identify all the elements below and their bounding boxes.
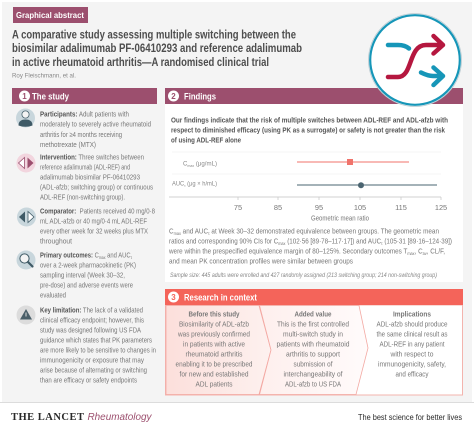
text: results: ratios and corresponding 90% CIs for C <box>169 236 298 246</box>
column: added value: arthritis to support <box>286 350 340 358</box>
text: primary outcomes: τ <box>131 255 132 260</box>
badge: graphical abstract <box>13 7 88 23</box>
column: added value: multi-switch study in <box>283 330 343 338</box>
axis: 85 <box>274 203 282 212</box>
axis: 75 <box>234 203 242 212</box>
column: implications: immunogenicity, safety, <box>378 360 446 368</box>
text: comparator: throughout <box>40 236 72 246</box>
text: intervention: Intervention: Three switches between <box>40 152 144 162</box>
text: comparator: every other week for 32 weeks plus MTX <box>40 226 148 236</box>
column: implications: and efficacy <box>396 370 429 378</box>
authors: Roy Fleischmann, et al. <box>12 72 76 80</box>
text: key limitation: Key limitation: The lack of a validated <box>40 306 143 314</box>
footer logo: THE LANCET <box>11 412 84 423</box>
axis: 95 <box>315 203 323 212</box>
row: AUC: (μg × h/mL) <box>186 180 217 188</box>
text: results: τ <box>381 241 383 246</box>
column: before this study: ADL patients <box>196 380 233 388</box>
axis: Geometric mean ratio <box>311 214 369 222</box>
text: results: were within the prespecified equivalence margin of 80–125%. Secondary outcomes T <box>169 246 448 256</box>
text: participants: moderately to severely active rheumatoid <box>40 120 151 128</box>
text: key limitation: immunogenicity or exposure that may <box>40 356 144 364</box>
column: added value <box>276 310 350 388</box>
text: key limitation: guidance which states that PK parameters <box>40 336 152 344</box>
axis: 115 <box>395 203 407 212</box>
text: intervention: reference adalimumab (ADL-REF) and <box>40 162 130 172</box>
column: implications: the same clinical result as <box>376 330 448 338</box>
footer tagline: The best science for better lives <box>358 413 462 422</box>
text: results: max <box>174 231 182 236</box>
row: Cmax: max <box>187 163 194 168</box>
chevron: before this study <box>166 306 271 394</box>
text: results: max <box>278 241 286 246</box>
text: primary outcomes: pre-dose) and adverse events were <box>40 280 133 290</box>
heading: research in context <box>165 289 463 305</box>
text: results: τ <box>208 231 210 236</box>
text: key limitation: are more likely to be sensitive to changes in <box>40 346 156 354</box>
text: results: (105·31 [89·16–124·39]) <box>383 236 452 246</box>
column: before this study: for new and established <box>180 370 248 378</box>
text: results: , CL/F, <box>427 246 445 256</box>
text: participants: Participants: Adult patients with <box>40 110 129 118</box>
text: results: (102·56 [89·78–117·17]) and AUC <box>285 236 382 246</box>
badge: graphical abstract: Graphical abstract <box>16 10 84 20</box>
text: results: av <box>423 251 427 256</box>
column: implications: ADL-afzb should produce <box>376 320 448 328</box>
text: participants: arthritis for ≥4 months receiving <box>40 130 122 139</box>
row: AUC: AUC <box>172 180 186 188</box>
icon: switching arrows <box>368 14 462 106</box>
text: intervention: ADL-REF (non-switching group). <box>40 192 125 202</box>
column: before this study: enabling it to be prescribed <box>176 360 252 368</box>
title <box>12 28 302 69</box>
text: key limitation: clinical efficacy endpoint; however, this <box>40 316 144 324</box>
title: A comparative study assessing multiple switching between the <box>12 28 296 42</box>
column: added value: Added value <box>294 310 332 318</box>
heading: research in context: 3 <box>171 293 176 302</box>
text: key finding: of using ADL-REF alone <box>171 136 241 144</box>
icon: participants <box>16 108 35 128</box>
heading: the study <box>12 88 157 104</box>
column: added value: patients with rheumatoid <box>276 340 350 348</box>
column: implications <box>376 310 448 378</box>
column: before this study: Biosimilarity of ADL-afzb <box>179 320 249 328</box>
footer logo <box>11 411 152 423</box>
heading: findings: Findings <box>184 92 216 102</box>
text: participants: methotrexate (MTX) <box>40 140 96 149</box>
text: key finding <box>171 116 448 144</box>
icon: key limitation <box>16 306 36 324</box>
text: primary outcomes: evaluated <box>40 290 66 300</box>
icon: intervention <box>16 154 36 172</box>
text: results: C <box>169 226 174 236</box>
panel: findings <box>165 88 463 282</box>
heading: research in context: Research in context <box>184 292 258 304</box>
icon: primary outcomes <box>16 250 36 270</box>
text: key limitation: arise because of alternating or switching <box>40 366 147 374</box>
panel: research in context <box>165 289 463 395</box>
text: results: , C <box>415 246 423 256</box>
text: results: max <box>407 251 415 256</box>
text: results: at Week 30–32 demonstrated equivalence between groups. The geometric mean <box>210 226 439 236</box>
text: primary outcomes: sampling interval (Week 30–32, <box>40 270 125 280</box>
title: biosimilar adalimumab PF-06410293 and reference adalimumab <box>12 42 302 55</box>
column: implications: Implications <box>393 310 431 318</box>
row: Cmax: C <box>183 160 188 168</box>
text: primary outcomes: Primary outcomes: C <box>40 250 107 260</box>
column: added value: This is the first controlled <box>277 320 349 328</box>
text: key limitation: study was designed following US FDA <box>40 326 141 334</box>
text: results <box>168 226 452 266</box>
row: AUC: τ <box>184 183 186 188</box>
row: Cmax: (μg/mL) <box>194 160 217 168</box>
chart: geometric mean ratio <box>169 152 447 222</box>
text: comparator <box>40 206 155 246</box>
text: key limitation: than are efficacy or safety endpoints <box>40 376 137 384</box>
text: participants <box>40 110 151 149</box>
heading: findings <box>165 88 463 104</box>
text: primary outcomes <box>40 250 136 300</box>
text: results: and AUC <box>181 226 209 236</box>
text: primary outcomes: and AUC <box>106 250 131 260</box>
text: comparator: mL ADL-afzb or 40 mg/0·4 mL ADL-REF <box>40 216 147 226</box>
axis <box>169 197 447 222</box>
text: primary outcomes: max <box>99 255 106 260</box>
text: intervention: (ADL-afzb; switching group) or continuous <box>40 182 153 192</box>
panel: the study <box>12 88 157 384</box>
row: Cmax <box>183 159 409 168</box>
heading: the study: The study <box>32 92 70 102</box>
heading: findings: 2 <box>171 92 176 101</box>
icon: comparator <box>17 208 36 226</box>
heading: the study: 1 <box>22 92 27 101</box>
text: key limitation <box>40 306 156 384</box>
text: intervention <box>40 152 153 202</box>
row: AUC <box>172 180 437 188</box>
axis: 105 <box>354 203 366 212</box>
text: results: and mean PK concentration profiles were similar between groups <box>169 256 353 266</box>
chevron: added value <box>260 306 368 394</box>
title: in active rheumatoid arthritis—A randomised clinical trial <box>12 56 269 69</box>
column: implications: ADL-REF in any patient <box>380 340 444 348</box>
column: before this study <box>176 310 252 388</box>
column: before this study: in patients with active <box>183 340 245 348</box>
text: primary outcomes: over a 2-week pharmacokinetic (PK) <box>40 260 136 270</box>
text: intervention: adalimumab biosimilar PF-06410293 <box>40 172 140 182</box>
column: before this study: was previously confirmed <box>177 330 250 338</box>
column: added value: submission of <box>294 360 333 368</box>
column: before this study: Before this study <box>188 310 240 318</box>
column: added value: ADL-afzb to US FDA <box>285 380 341 388</box>
column: added value: interchangeability of <box>284 370 343 378</box>
column: before this study: rheumatoid arthritis <box>186 350 243 358</box>
column: implications: with respect to <box>390 350 434 358</box>
axis: 125 <box>435 203 447 212</box>
text: comparator: Comparator: Patients received 40 mg/0·8 <box>40 206 155 216</box>
footer logo: Rheumatology <box>88 411 152 423</box>
